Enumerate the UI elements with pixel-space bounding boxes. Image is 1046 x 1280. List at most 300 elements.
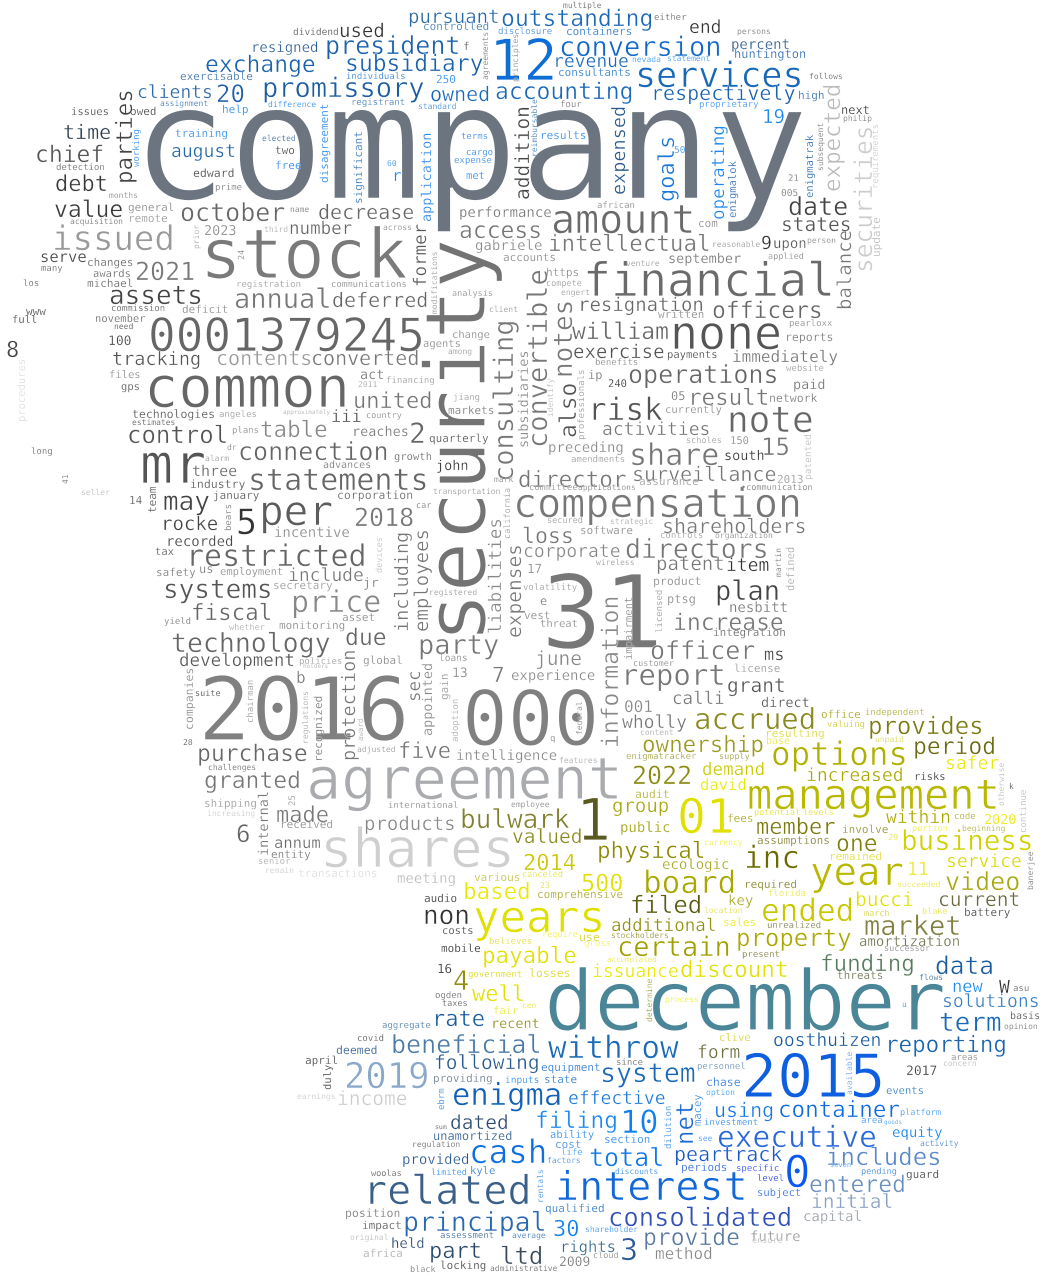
word group: olive and yellow shoulder region: code (954, 812, 976, 822)
word group: grey face region: applications (578, 483, 636, 492)
word group: dark grey and neutral top words: 24 (237, 250, 247, 260)
word group: olive and yellow shoulder region: believes (489, 937, 532, 947)
word group: dark grey and neutral top words: reasonable (712, 240, 760, 249)
word group: blue lower region: beneficial (391, 1030, 542, 1059)
word group: grey face region: gps (121, 381, 140, 393)
word group: neutral lower words (297, 961, 1040, 1275)
word group: dark grey and neutral top words: los (23, 279, 39, 289)
word group: grey face region: 05 (671, 389, 685, 403)
word group: grey face region: professionals (577, 370, 587, 440)
word group: grey face region: companies (182, 668, 196, 730)
word group: olive and yellow shoulder region: florida (768, 889, 806, 899)
word group: blue lower region: see (698, 1134, 713, 1143)
word group: blue lower region: events (886, 1085, 924, 1097)
word group: grey face region: gain (438, 674, 451, 700)
word group: grey face region: registered (429, 588, 477, 597)
word group: dark grey and neutral top words: parties (112, 89, 138, 184)
word group: grey face region: markets (448, 404, 494, 417)
word group: grey face region: costs (442, 925, 474, 937)
word group: dark grey and neutral top words: written (658, 308, 704, 321)
word group: olive and yellow shoulder region: remained (829, 850, 882, 863)
word group: top blue hair region: percent (731, 37, 790, 53)
word group: grey face region: q (550, 734, 555, 744)
word group: top blue hair region: clients (137, 82, 213, 103)
word group: blue lower region: 3 (620, 1233, 638, 1268)
word group: blue lower region: includes (826, 1143, 942, 1171)
word group: grey face region: officer (650, 636, 755, 665)
word group: blue lower region: net (671, 1102, 699, 1145)
word group: blue lower region: state (544, 1073, 577, 1086)
word group: grey face region: california (503, 488, 513, 539)
word group: grey face region: jiang (453, 393, 480, 403)
word group: top blue hair region: 20 (216, 80, 245, 108)
word group: grey face region: corporate (523, 541, 621, 562)
word group: grey face region: software (580, 524, 633, 537)
word group: neutral lower words: income (337, 1087, 407, 1110)
word group: blue lower region: seven (830, 1161, 851, 1169)
word group: dark grey and neutral top words: many (41, 264, 63, 274)
word group: neutral lower words: original (350, 1233, 389, 1242)
word group: grey face region: recorded (166, 534, 233, 550)
word group: grey face region: note (727, 400, 814, 441)
word group: dark grey and neutral top words: need (114, 322, 133, 331)
word group: dark grey and neutral top words: www (26, 305, 46, 318)
word group: top blue hair region: pursuant (408, 6, 500, 28)
word group: grey face region: devices (375, 537, 385, 573)
word group: neutral lower words: 2017 (906, 1064, 937, 1079)
word group: olive and yellow shoulder region: within (886, 807, 951, 828)
word group: blue lower region: dated (450, 1111, 509, 1134)
word group: top blue hair region: assignment (160, 99, 208, 108)
word group: olive and yellow shoulder region: form (697, 1042, 740, 1063)
word group: grey face region: surveillance (632, 462, 776, 486)
word group: grey face region: assurance (639, 475, 699, 488)
word group: dark grey and neutral top words: 9 (761, 233, 772, 254)
word group: top blue hair region: subsidiary (345, 51, 483, 77)
word group: blue lower region: 30 (553, 1217, 580, 1242)
word group: grey face region: protection (339, 650, 360, 761)
word group: blue lower region: limited (431, 1168, 467, 1178)
word group: olive and yellow shoulder region: use (579, 930, 600, 944)
word group: dark grey and neutral top words: 005 (781, 188, 798, 199)
word group: grey face region: threat (540, 618, 578, 630)
word group: top blue hair region: difference (268, 100, 316, 109)
word group: grey face region: convertible (523, 269, 554, 448)
word group: top blue hair region: conversion (559, 32, 722, 63)
word group: blue lower region: enigma (452, 1078, 562, 1113)
word: company: company (131, 50, 810, 237)
word group: blue lower region: new (952, 977, 983, 997)
word group: grey face region: b (296, 668, 306, 687)
word group: dark grey and neutral top words: 21 (788, 174, 799, 184)
word group: grey face region: agents (423, 338, 461, 350)
word group: olive and yellow shoulder region: bucci (855, 888, 914, 911)
word group: grey face region: loans (439, 653, 468, 664)
word group: top blue hair region: training (175, 127, 228, 140)
word group: grey face region: loss (522, 524, 574, 549)
word group: grey face region: south (724, 448, 765, 464)
word group: grey face region: subsidiaries (516, 350, 532, 448)
word group: grey face region: increasing (207, 809, 255, 818)
word group: grey face region: direct (761, 695, 810, 711)
word group: grey face region: grant (727, 674, 786, 697)
word group: grey face region: price (291, 585, 381, 620)
word group: olive and yellow shoulder region: amortization (859, 934, 960, 950)
word group: neutral lower words: 16 (437, 961, 452, 976)
word: december: december (544, 952, 946, 1050)
word group: grey face region: ms (764, 645, 784, 665)
word group: top blue hair region: controlled (423, 20, 489, 33)
word group: grey face region: team (146, 486, 159, 513)
word group: grey face region: five (398, 739, 451, 764)
word group: grey face region: identify (546, 378, 555, 417)
word group: grey face region: annum (274, 834, 321, 852)
word group: dark grey and neutral top words: access (459, 218, 542, 244)
word group: grey face region: immediately (732, 347, 838, 366)
word group: grey face region: defined (785, 547, 797, 591)
word group: neutral lower words: position (345, 1206, 400, 1220)
word group: grey face region: internal (256, 791, 272, 856)
word group: dark grey and neutral top words: commission (111, 304, 165, 314)
word group: olive and yellow shoulder region: years (473, 892, 605, 943)
word group: top blue hair region: free (275, 159, 302, 172)
word group: blue lower region: ability (550, 1129, 594, 1141)
word group: olive and yellow shoulder region: base (766, 736, 790, 747)
word group: blue lower region: life (561, 1148, 583, 1158)
word group: dark grey and neutral top words: principles (511, 34, 520, 82)
word group: grey face region: patent (656, 553, 725, 575)
word group: olive and yellow shoulder region: service (946, 851, 1022, 872)
word group: blue lower region: subject (757, 1187, 801, 1199)
word group: top blue hair region: 60 (387, 159, 397, 168)
word group: top blue hair region: respectively (651, 81, 796, 105)
word group: dark grey and neutral top words: decrease (318, 200, 414, 224)
word group: blue lower region: unamortized (433, 1129, 512, 1143)
word group: blue lower region: interest (555, 1164, 748, 1210)
word group: grey face region: preceding (548, 440, 624, 456)
word group: olive and yellow shoulder region: stockholders (611, 931, 669, 940)
word group: blue lower region: capital (803, 1209, 862, 1225)
word group: blue lower region (336, 951, 1040, 1270)
word group: top blue hair region: 50 (674, 145, 686, 156)
word group: top blue hair region: disclosure (498, 27, 552, 37)
word group: top blue hair region: services (635, 56, 804, 96)
word group: grey face region: contents (216, 346, 312, 370)
word group: grey face region: 7 (492, 663, 505, 687)
word group: grey face region: angeles (219, 410, 257, 420)
word group: large grey words: compensation (513, 481, 802, 527)
word group: grey face region: bears (224, 504, 234, 531)
word group: olive and yellow shoulder region: portion (912, 824, 948, 834)
word group: olive and yellow shoulder region: well (472, 982, 525, 1007)
word group: large grey words: financial (583, 253, 835, 307)
word group: dark grey and neutral top words: 2021 (135, 257, 195, 286)
word group: grey face region: june (535, 647, 582, 670)
word group: grey face region: notes (549, 300, 579, 378)
word group: top blue hair region: results (540, 129, 586, 142)
word group: olive and yellow shoulder region: threats (837, 969, 883, 982)
word group: blue lower region: ltd (500, 1242, 543, 1270)
word group: grey face region: scholes (686, 436, 722, 446)
word group: grey face region: senior (258, 857, 291, 867)
word group: dark grey and neutral top words: october (180, 198, 285, 227)
word group: grey face region: network (769, 391, 818, 405)
word group: neutral lower words: sum (435, 1123, 447, 1131)
word group: grey face region: amendments (571, 455, 625, 465)
word group: grey face region: change (452, 329, 490, 341)
word group: olive and yellow shoulder region: march (864, 909, 890, 919)
word group: grey face region: act (360, 367, 384, 383)
word group: neutral lower words: concern (943, 1059, 977, 1068)
word group: grey face region: plans (232, 426, 259, 436)
word group: grey face region: sec (405, 670, 425, 702)
word group: top blue hair region: statement (667, 54, 711, 63)
word group: olive and yellow shoulder region: one (836, 831, 878, 857)
word group: top blue hair region: used (339, 20, 385, 42)
word group: olive and yellow shoulder region: losses (529, 966, 571, 980)
word group: olive and yellow shoulder region: 500 (581, 869, 623, 897)
word group: olive and yellow shoulder region: 11 (907, 859, 929, 880)
word group: grey face region: 5 (236, 503, 257, 543)
word group: grey face region: quarterly (429, 432, 489, 445)
word group: blue lower region: activity (920, 1139, 959, 1148)
word group: olive and yellow shoulder region: issuance (592, 961, 679, 982)
word group: olive and yellow shoulder region: ceo (522, 1001, 537, 1010)
word group: dark grey and neutral top words: agreements (481, 32, 490, 80)
word group: olive and yellow shoulder region: continue (1019, 790, 1029, 833)
word group: top blue hair region: expensed (609, 106, 630, 195)
word group: olive and yellow shoulder region: location (704, 906, 743, 915)
word group: dark grey and neutral top words: f (463, 40, 470, 53)
word group: blue lower region: entered (809, 1172, 906, 1198)
word group: grey face region: purchase (197, 741, 308, 767)
word group: neutral lower words: method (655, 1244, 713, 1263)
word group: neutral lower words: woolas (371, 1169, 402, 1179)
word group: grey face region: 150 (730, 435, 749, 447)
word group: dark grey and neutral top words: serve (40, 248, 87, 266)
word group: dark grey and neutral top words (12, 1, 883, 344)
word group: grey face region: volatility (523, 583, 578, 593)
word group: grey face region: challenges (208, 763, 256, 772)
word group: olive and yellow shoulder region: independent (865, 708, 925, 718)
word group: grey face region: vest (524, 609, 550, 622)
word group: olive and yellow shoulder region: member (756, 815, 835, 840)
word group: grey face region: country (366, 411, 402, 421)
word group: grey face region: car (416, 501, 431, 511)
word group: blue lower region: factors (547, 1156, 581, 1165)
word group: olive and yellow shoulder region: demand (702, 760, 765, 780)
word group: grey face region: due (345, 625, 387, 651)
word group: olive and yellow shoulder region: recent (491, 1016, 540, 1032)
word group: grey face region: information (598, 596, 624, 748)
word group: olive and yellow shoulder region: banerjee (1026, 851, 1035, 890)
word group: dark grey and neutral top words: upon (773, 236, 807, 252)
word group: grey face region: meeting (397, 871, 456, 887)
word group: olive and yellow shoulder region: enigmatracker (626, 752, 697, 762)
word group: dark grey and neutral top words: date (788, 192, 848, 221)
word group: blue lower region: specific (736, 1164, 779, 1174)
word group: blue lower region: term (939, 1008, 1002, 1038)
word group: dark grey and neutral top words: four (560, 100, 582, 110)
word group: grey face region: include (288, 565, 364, 586)
word group: large grey words: 0001379245 (148, 308, 425, 362)
word group: grey face region: tax (155, 546, 174, 558)
word group: olive and yellow shoulder region: inc (744, 840, 800, 876)
word group: grey face region: 15 (761, 433, 790, 461)
word group: blue lower region: effective (568, 1088, 666, 1109)
word group: grey face region: granted (204, 768, 301, 794)
word group: dark grey and neutral top words: 2023 (204, 223, 237, 239)
word group: grey face region: table (260, 417, 328, 443)
word group: dark grey and neutral top words: balance (834, 230, 856, 310)
word group: dark grey and neutral top words: next (841, 103, 870, 117)
word group: grey face region: 2011 (358, 380, 377, 389)
word group: olive and yellow shoulder region: ownership (642, 732, 764, 758)
word group: grey face region: international (388, 801, 458, 811)
word group: neutral lower words: administrative (490, 1264, 558, 1273)
word group: top blue hair region: huntington (734, 47, 806, 61)
word group: top blue hair region: enigmalok (727, 160, 739, 218)
word group: dark grey and neutral top words: two (275, 144, 295, 157)
word group: top blue hair region: cargo (466, 148, 493, 158)
word group: grey face region: received (280, 818, 333, 831)
word group: olive and yellow shoulder region: currency (704, 838, 743, 847)
word group: grey face region: reaches (352, 424, 409, 440)
word group: dark grey and neutral top words: across (383, 223, 412, 232)
word group: olive and yellow shoulder region: successor (884, 944, 930, 954)
word group: dark grey and neutral top words: persons (737, 27, 771, 36)
word group: dark grey and neutral top words: end (689, 17, 722, 38)
word group: blue lower region: inputs (505, 1075, 539, 1086)
word group: grey face region (6, 269, 838, 955)
word group: top blue hair region (132, 6, 824, 222)
word group: blue lower region: section (604, 1133, 650, 1146)
word group: blue lower region: total (589, 1143, 664, 1172)
word group: olive and yellow shoulder region: period (913, 734, 996, 760)
word group: grey face region: incentive (274, 525, 350, 541)
word group: blue lower region: 2019 (344, 1056, 430, 1097)
word group: grey face region: directors (625, 534, 769, 565)
word group: neutral lower words: locking (440, 1259, 486, 1272)
word group: dark grey and neutral top words: registration (236, 280, 301, 290)
word group: large grey words: 31 (541, 554, 664, 673)
word group: blue lower region: level (757, 1174, 784, 1184)
word group: olive and yellow shoulder region: resulting (765, 727, 825, 740)
word group: blue lower region: system (600, 1058, 696, 1089)
word group: olive and yellow shoulder region: clive (719, 1032, 751, 1044)
word group: top blue hair region: terms (461, 132, 488, 142)
word group: olive and yellow shoulder region: additional (611, 916, 716, 936)
word group: grey face region: including (392, 532, 413, 632)
word group: dark grey and neutral top words: pearloxx (789, 319, 833, 329)
word group: grey face region: fiscal (191, 600, 272, 626)
word group: dark grey and neutral top words: months (109, 191, 138, 200)
word group: grey face region: experience (511, 668, 595, 684)
word group: dark grey and neutral top words: accounts (503, 251, 556, 264)
word group: grey face region: industry (190, 477, 245, 491)
word group: neutral lower words: covid (357, 1034, 384, 1044)
word group: grey face region: estimates (132, 418, 176, 427)
word group: neutral lower words: guard (906, 1168, 939, 1181)
word group: neutral lower words: basis (1010, 1011, 1040, 1022)
word group: grey face region: website (786, 364, 824, 374)
word group: blue lower region: providing (433, 1072, 493, 1085)
word group: dark grey and neutral top words: communications (331, 280, 407, 290)
word group: grey face region: increase (673, 610, 784, 636)
word group: grey face region: systems (163, 575, 273, 605)
word group: dark grey and neutral top words: awards (93, 268, 131, 280)
word group: dark grey and neutral top words: issued (52, 219, 175, 259)
word group: grey face region: risk (588, 392, 663, 428)
word group: grey face region: may (163, 487, 210, 517)
word group: olive and yellow shoulder region: gross (584, 939, 611, 949)
word group: top blue hair region: containers (566, 25, 632, 38)
word group: blue lower region: withrow (548, 1030, 679, 1066)
word group: blue lower region: oosthuizen (773, 1030, 881, 1051)
word group: olive and yellow shoulder region: determine (645, 978, 654, 1022)
word group: blue lower region: cash (469, 1133, 547, 1171)
word group: dark grey and neutral top words: person (807, 236, 836, 245)
word group: dark grey and neutral top words: applied (768, 252, 804, 262)
word group: olive and yellow shoulder region: supply (719, 752, 750, 762)
word group: dark grey and neutral top words: intellectual (548, 231, 711, 257)
word group: grey face region: features (559, 756, 598, 765)
word group: dark grey and neutral top words: november (95, 313, 146, 325)
word group: grey face region: •communication (741, 483, 813, 493)
word group: blue lower region: ebrm (437, 1088, 447, 1110)
word group: blue lower region: investment (704, 1118, 758, 1128)
word group: grey face region: alarm (205, 454, 229, 463)
word group: grey face region: holders (303, 663, 329, 670)
word group: blue lower region: 2015 (741, 1042, 886, 1112)
word group: olive and yellow shoulder region: succeeded (897, 880, 941, 889)
word group: grey face region: result (688, 385, 769, 411)
word group: dark grey and neutral top words: debt (55, 172, 108, 197)
word group: grey face region: 25 (288, 795, 298, 806)
word group: grey face region: nesbitt (729, 600, 788, 616)
word group: neutral lower words: future (750, 1229, 801, 1245)
word group: blue lower region: aggregate (382, 1021, 431, 1031)
word group: grey face region: report (621, 658, 726, 692)
word group: dark grey and neutral top words: african (597, 201, 635, 211)
word group: grey face region: entity (271, 848, 311, 861)
word group: dark grey and neutral top words: prior (192, 225, 201, 249)
word group: olive and yellow shoulder region: valuing (827, 720, 865, 730)
word group: dark grey and neutral top words: chief (35, 142, 104, 168)
word group: large grey words: stock (200, 215, 408, 295)
word group: top blue hair region: promissory (262, 73, 425, 104)
word group: grey face region: liabilities (486, 518, 506, 634)
word group: grey face region: corporation (337, 488, 413, 502)
word group: grey face region: secretary (273, 579, 333, 592)
word group: dark grey and neutral top words: issues (71, 106, 109, 118)
word group: blue lower region: data (935, 951, 994, 980)
word group: grey face region: regulations (301, 691, 310, 744)
word group: dark grey and neutral top words: multiple (563, 1, 602, 10)
word group: top blue hair region: application (419, 133, 435, 222)
word group: dark grey and neutral top words: amount (551, 197, 696, 243)
word group: dark grey and neutral top words: acquisition (70, 217, 123, 226)
word group: olive and yellow shoulder region: otherwise (997, 762, 1006, 806)
word group: olive and yellow shoulder region: 29 (888, 833, 898, 843)
word group: olive and yellow shoulder region: 01 (677, 789, 735, 845)
word group: top blue hair region: owned (430, 82, 490, 106)
word group: large grey words: none (670, 306, 782, 360)
word group: blue lower region: equipment (541, 1061, 601, 1074)
word group: blue lower region: part (429, 1239, 482, 1264)
word group: olive and yellow shoulder region: sales (723, 916, 756, 929)
word group: grey face region: party (418, 630, 499, 661)
